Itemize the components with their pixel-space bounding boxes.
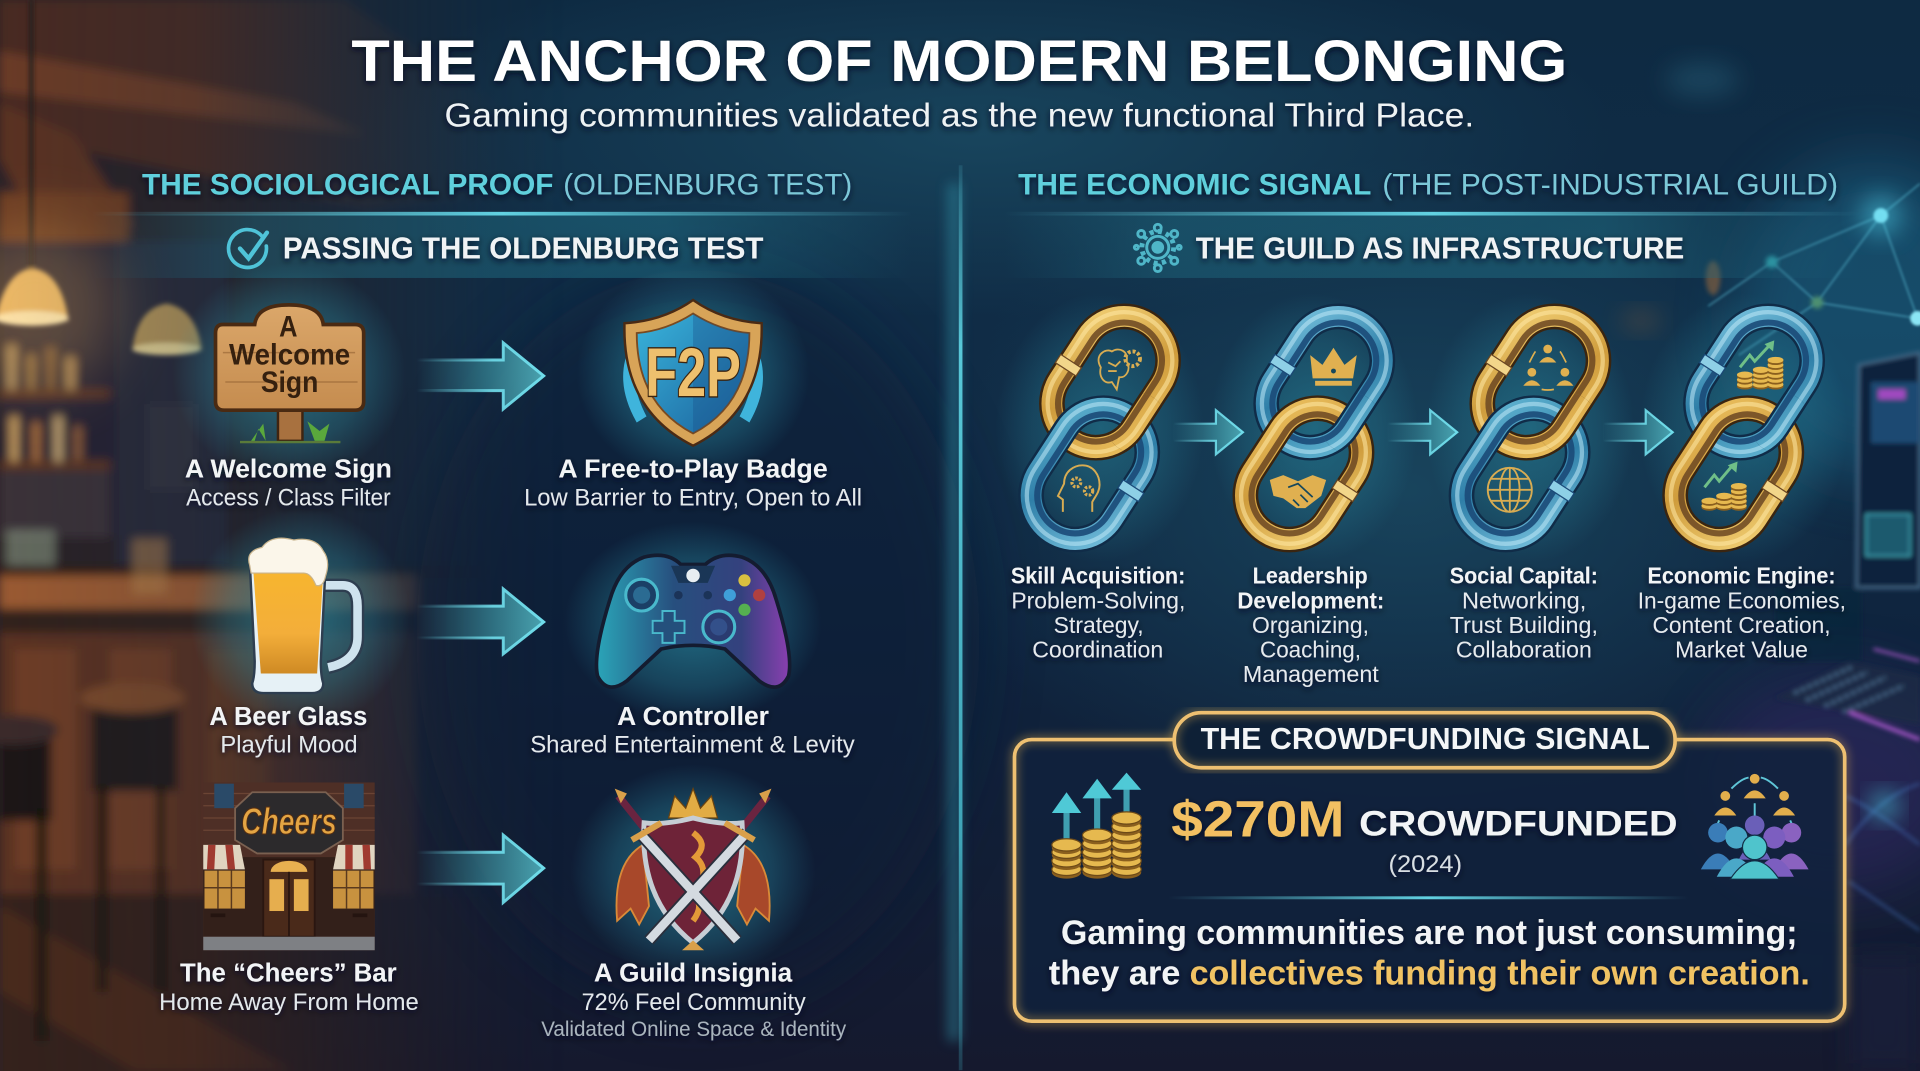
icon: head with gears: [1058, 465, 1100, 512]
text: skill acquisition: [1011, 562, 1185, 663]
icon: controller: [564, 522, 822, 722]
label: controller: A Controller: [617, 703, 769, 731]
text: skill acquisition: Problem-Solving,: [1011, 588, 1185, 614]
icon: handshake: [1270, 475, 1326, 508]
label: cheers bar: [159, 959, 419, 1016]
text: economic engine: Content Creation,: [1652, 612, 1831, 638]
background: tech network and monitor: [1621, 62, 1920, 1071]
text: social capital: Networking,: [1462, 588, 1586, 614]
icon: coin stacks with arrows: [1052, 773, 1141, 879]
banner: guild as infrastructure: [1004, 212, 1861, 278]
divider: [1168, 896, 1689, 899]
icon: welcome sign: Sign: [261, 366, 318, 399]
amount: CROWDFUNDED: [1359, 804, 1678, 844]
text: leadership development: Management: [1243, 661, 1379, 687]
icon: check badge: [229, 230, 267, 268]
text: leadership development: Organizing,: [1252, 612, 1369, 638]
heading: sociological proof: THE SOCIOLOGICAL PROOF: [142, 169, 553, 202]
label: welcome sign: A Welcome Sign: [185, 456, 392, 484]
label: guild insignia: [541, 959, 846, 1041]
panel: sociological proof: [92, 169, 912, 1041]
label: welcome sign: [185, 456, 392, 512]
text: social capital: [1450, 562, 1598, 663]
callout text: [1049, 914, 1810, 992]
icon: guild insignia: [571, 764, 816, 980]
icon: welcome sign: A: [279, 311, 298, 344]
text: leadership development: Leadership: [1253, 562, 1368, 588]
label: welcome sign: Access / Class Filter: [186, 485, 391, 512]
label: free-to-play badge: A Free-to-Play Badge: [558, 456, 828, 484]
heading: sociological proof: (OLDENBURG TEST): [563, 169, 852, 202]
text: skill acquisition: Skill Acquisition:: [1011, 562, 1185, 588]
arrow: skill to leadership: [1173, 410, 1243, 454]
chain: social capital: [1442, 304, 1619, 552]
text: social capital: Trust Building,: [1450, 612, 1598, 638]
icon: beer glass: [190, 508, 410, 729]
text: social capital: Collaboration: [1456, 637, 1592, 663]
icon: people circle: [1523, 345, 1573, 390]
heading: economic signal: (THE POST-INDUSTRIAL GUILD): [1382, 169, 1838, 202]
arrow: social to economic: [1603, 410, 1673, 454]
arrow: leadership to social: [1387, 410, 1457, 454]
label: guild insignia: Validated Online Space & Identity: [541, 1017, 846, 1041]
panel: economic signal: [996, 169, 1861, 1021]
text: skill acquisition: Coordination: [1032, 637, 1163, 663]
arrow: bar to insignia: [416, 835, 544, 902]
chain: skill acquisition: [1009, 304, 1189, 550]
text: leadership development: [1237, 562, 1384, 687]
panel: crowdfunding signal: [1014, 713, 1845, 1021]
callout text: Gaming communities are not just consuming;: [1061, 914, 1798, 952]
icon: gear network: [1134, 224, 1181, 272]
background: blurred bar scene: [0, 0, 455, 1071]
icon: community crowd: [1701, 774, 1809, 879]
text: skill acquisition: Strategy,: [1054, 612, 1144, 638]
icon: brain and gear: [1099, 350, 1140, 389]
text: leadership development: Coaching,: [1260, 637, 1361, 663]
text: economic engine: Market Value: [1675, 637, 1808, 663]
arrow: beer to controller: [416, 589, 544, 654]
text: leadership development: Development:: [1237, 588, 1384, 614]
label: beer glass: [209, 703, 367, 758]
label: cheers bar: The “Cheers” Bar: [180, 959, 397, 987]
icon: globe: [1488, 468, 1532, 512]
subtitle: Gaming communities validated as the new functional Third Place.: [444, 98, 1474, 135]
icon: free-to-play badge: [577, 266, 809, 481]
amount: (2024): [1389, 851, 1462, 878]
label: beer glass: Playful Mood: [220, 731, 358, 758]
banner: passing the test: [92, 212, 912, 278]
heading: economic signal: THE ECONOMIC SIGNAL: [1018, 169, 1371, 202]
text: economic engine: In-game Economies,: [1638, 588, 1846, 614]
label: controller: [530, 703, 855, 758]
callout text: collectives funding their own creation.: [1190, 954, 1810, 992]
label: free-to-play badge: [524, 456, 862, 512]
banner title: THE GUILD AS INFRASTRUCTURE: [1196, 231, 1684, 265]
icon: growth chart and coins bottom: [1701, 462, 1747, 511]
amount: $270M: [1171, 789, 1344, 847]
icon: cheers bar: Cheers: [241, 801, 337, 842]
pill heading: THE CROWDFUNDING SIGNAL: [1201, 722, 1650, 756]
callout text: they are: [1049, 954, 1180, 992]
text: social capital: Social Capital:: [1450, 562, 1598, 588]
chain: economic engine: [1654, 304, 1830, 552]
icon: cheers bar: [203, 782, 375, 950]
center divider: [959, 165, 962, 1070]
text: economic engine: Economic Engine:: [1648, 562, 1836, 588]
amount: [1171, 789, 1678, 878]
banner title: PASSING THE OLDENBURG TEST: [283, 231, 764, 265]
label: cheers bar: Home Away From Home: [159, 989, 419, 1016]
label: free-to-play badge: Low Barrier to Entry, Open to All: [524, 485, 862, 512]
icon: welcome sign: [173, 263, 405, 484]
icon: free-to-play badge: F2P: [645, 334, 741, 411]
icon: welcome sign: Welcome: [229, 338, 350, 371]
label: beer glass: A Beer Glass: [209, 703, 367, 731]
text: economic engine: [1638, 562, 1846, 663]
label: controller: Shared Entertainment & Levity: [530, 731, 855, 758]
label: guild insignia: 72% Feel Community: [582, 989, 806, 1016]
label: guild insignia: A Guild Insignia: [594, 959, 793, 987]
chain: leadership development: [1226, 304, 1402, 552]
title: THE ANCHOR OF MODERN BELONGING: [351, 29, 1567, 94]
pill heading: [1174, 713, 1675, 768]
heading: economic signal: [1018, 169, 1838, 202]
icon: growth chart and coins top: [1737, 340, 1783, 390]
heading: sociological proof: [142, 169, 852, 202]
icon: crown: [1310, 348, 1357, 386]
arrow: sign to badge: [416, 343, 544, 409]
